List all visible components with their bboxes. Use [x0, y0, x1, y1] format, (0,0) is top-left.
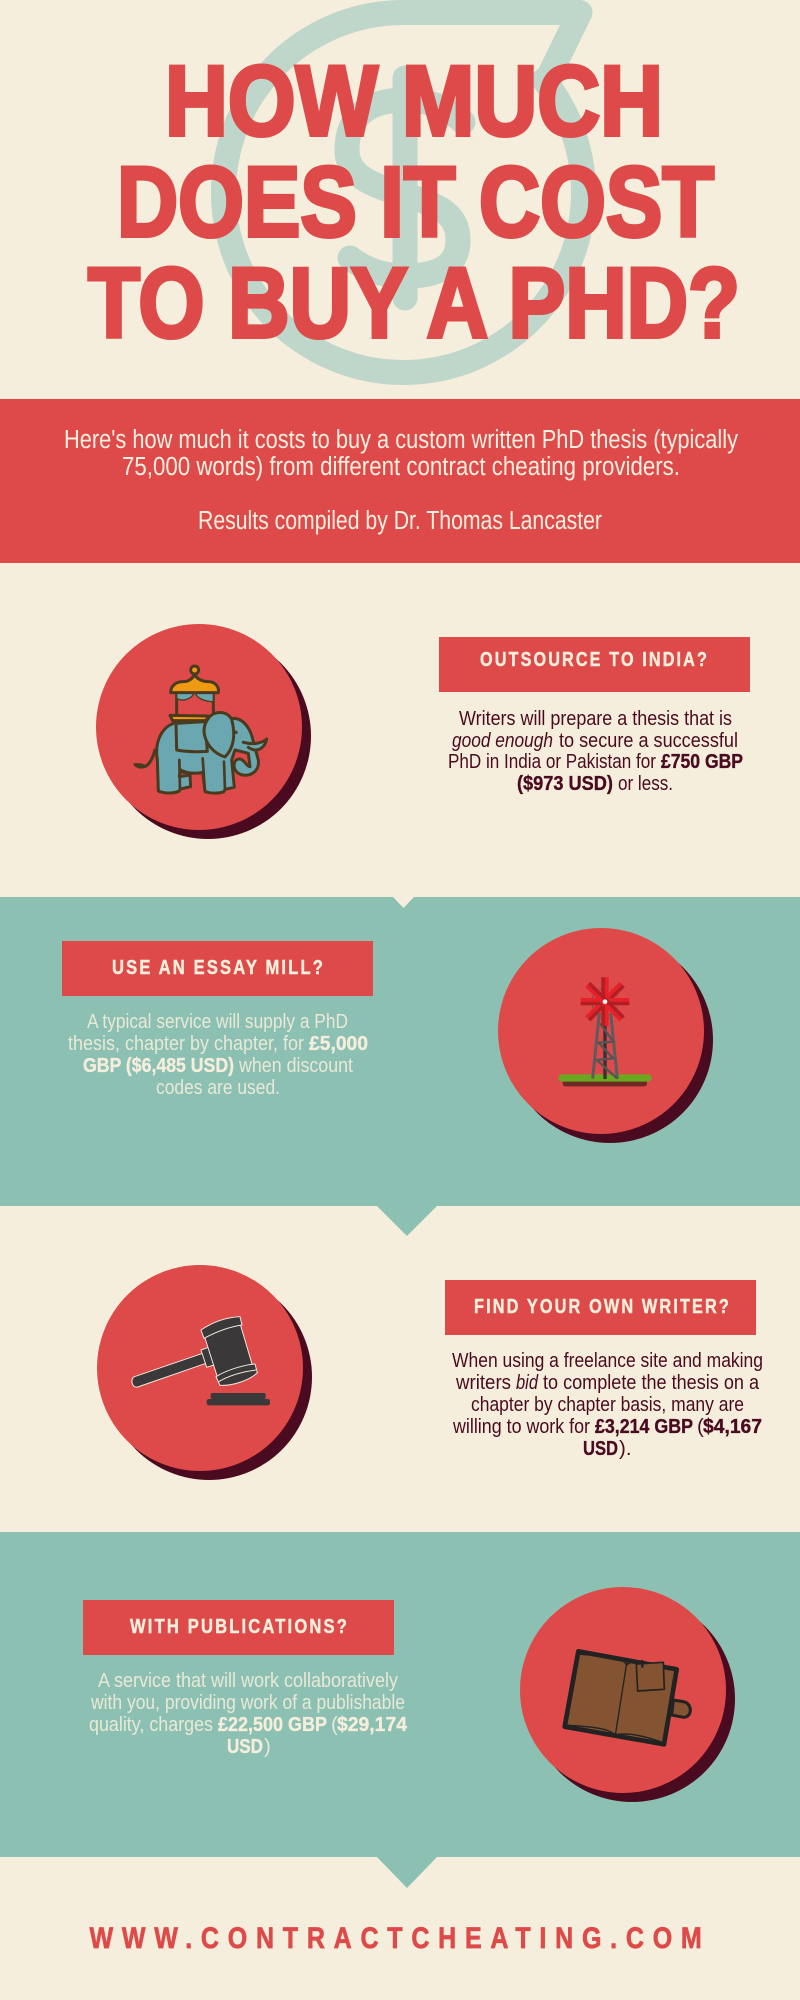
text: outsource to India: ($973 USD)	[517, 772, 613, 795]
banner: find your own writer	[445, 1280, 756, 1335]
banner: essay mill	[62, 941, 373, 996]
text: with publications	[89, 1669, 408, 1758]
text: essay mill	[68, 1010, 368, 1099]
text: outsource to India: Writers will prepare a thesis that is	[459, 707, 732, 730]
icon: elephant in red circle	[96, 624, 311, 839]
text: essay mill: £5,000	[309, 1032, 368, 1055]
text: with publications: $29,174	[337, 1713, 408, 1736]
panel: essay mill	[0, 897, 800, 1236]
banner: with publications: WITH PUBLICATIONS?	[130, 1616, 349, 1638]
title	[88, 45, 740, 358]
text: with publications: (	[331, 1713, 338, 1736]
banner: outsource to India	[439, 637, 750, 692]
text: outsource to India: PhD in India or Pakistan for	[448, 750, 656, 773]
text: essay mill: A typical service will supply a PhD	[87, 1010, 348, 1033]
text: essay mill: when discount	[238, 1054, 353, 1077]
text: find your own writer: to complete the thesis on a	[543, 1371, 760, 1394]
text: find your own writer: £3,214 GBP	[595, 1415, 693, 1438]
text: with publications: £22,500 GBP	[218, 1713, 327, 1736]
icon: gavel in red circle	[97, 1265, 312, 1480]
panel: with publications	[0, 1532, 800, 1888]
intro text: Results compiled by Dr. Thomas Lancaster	[198, 507, 602, 535]
text: with publications: quality, charges	[89, 1713, 213, 1736]
text: with publications: with you, providing work of a publishable	[90, 1691, 405, 1714]
text: with publications: USD	[227, 1735, 263, 1758]
text: find your own writer: bid	[516, 1371, 538, 1394]
text: essay mill: GBP ($6,485 USD)	[83, 1054, 234, 1077]
text: find your own writer: willing to work for	[452, 1415, 590, 1438]
panel: header	[88, 12, 740, 372]
text: find your own writer	[452, 1349, 763, 1460]
intro text: 75,000 words) from different contract cheating providers.	[122, 453, 680, 481]
title: DOES IT COST	[117, 146, 714, 257]
panel: find your own writer	[97, 1265, 763, 1480]
text: essay mill: codes are used.	[156, 1076, 280, 1099]
intro text	[64, 426, 738, 535]
text: find your own writer: writers	[455, 1371, 511, 1394]
text: essay mill: thesis, chapter by chapter, for	[68, 1032, 304, 1055]
banner: essay mill: USE AN ESSAY MILL?	[112, 957, 325, 979]
text: with publications: )	[264, 1735, 271, 1758]
text: outsource to India: £750 GBP	[661, 750, 743, 773]
banner: outsource to India: OUTSOURCE TO INDIA?	[480, 649, 709, 671]
text: find your own writer: chapter by chapter basis, many are	[471, 1393, 744, 1416]
title: HOW MUCH	[165, 45, 663, 156]
banner: find your own writer: FIND YOUR OWN WRITER?	[474, 1296, 731, 1318]
icon: dollar sign in refresh ring	[223, 12, 583, 372]
text: outsource to India: good enough	[452, 729, 553, 752]
banner: with publications	[83, 1600, 394, 1655]
icon: notebook in red circle	[520, 1587, 735, 1802]
text: with publications: A service that will work collaboratively	[98, 1669, 399, 1692]
icon: windmill in red circle	[498, 928, 713, 1143]
text: find your own writer: (	[697, 1415, 704, 1438]
text: outsource to India: or less.	[618, 772, 673, 795]
panel: intro band	[0, 399, 800, 563]
text: find your own writer: USD	[583, 1437, 618, 1460]
text: find your own writer: $4,167	[703, 1415, 762, 1438]
text: outsource to India	[448, 707, 743, 795]
text: find your own writer: ).	[619, 1437, 632, 1460]
panel: outsource to India	[96, 624, 750, 839]
text: outsource to India: to secure a successful	[559, 729, 738, 752]
